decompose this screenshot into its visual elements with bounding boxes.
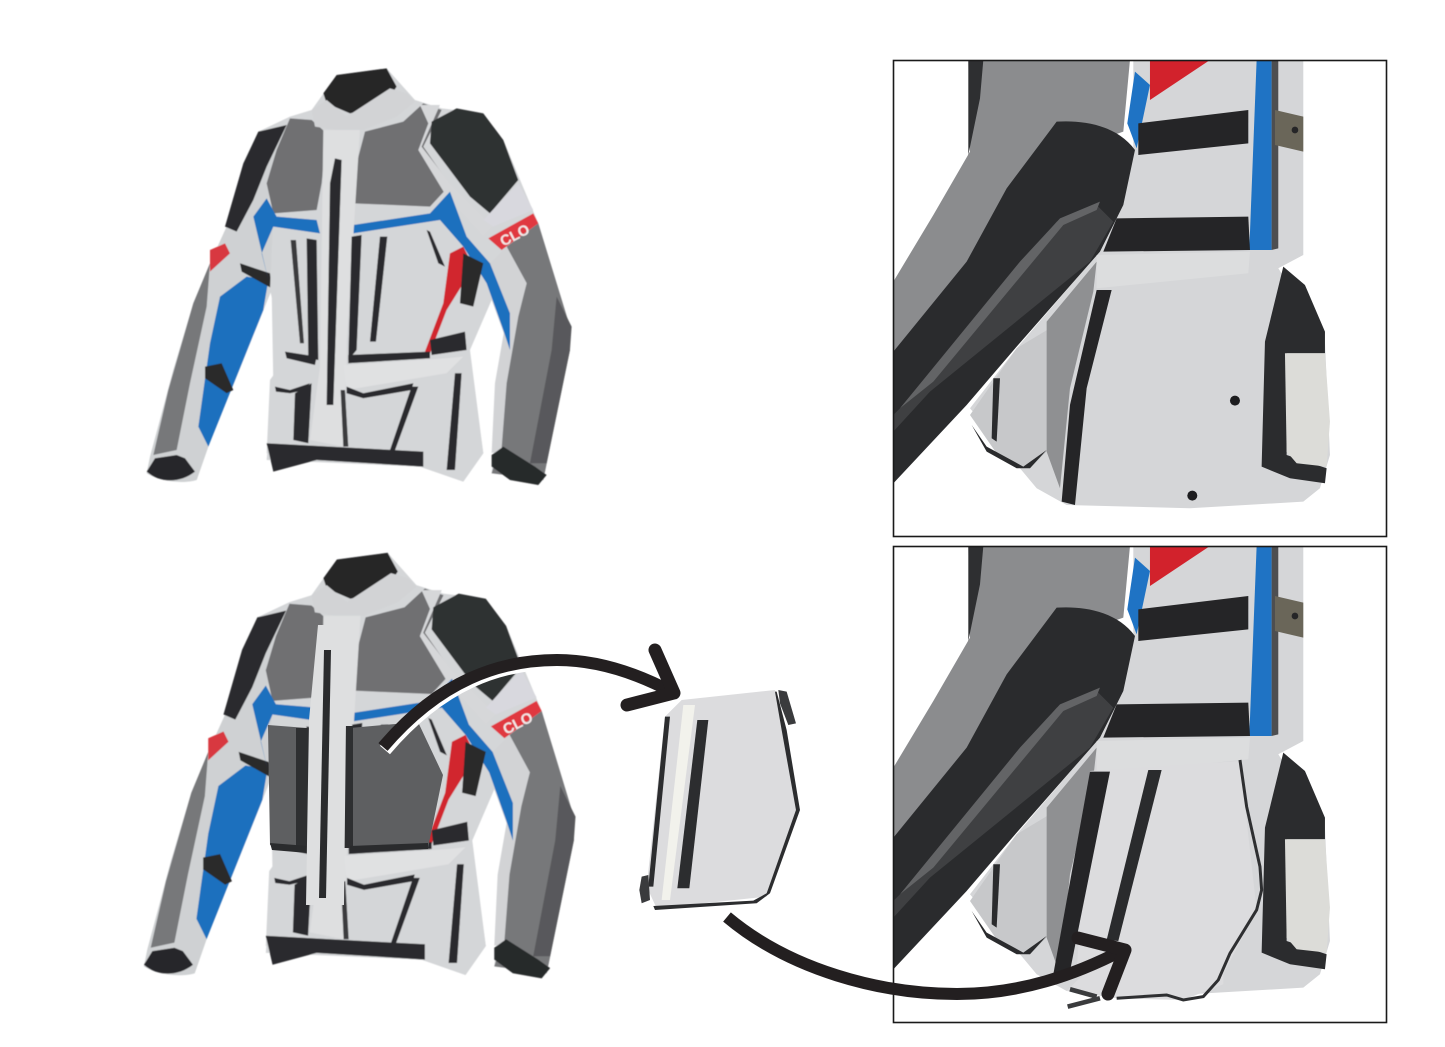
jacket with panel attached (top left) <box>147 68 572 485</box>
mesh lower band <box>270 843 428 853</box>
black zip strip <box>1062 290 1112 505</box>
centre placket <box>306 625 356 905</box>
inset photo: closed lower jacket <box>893 60 1330 508</box>
centre zip <box>319 650 331 898</box>
arrow: panel added to inset <box>727 917 1125 994</box>
detachable panel <box>639 690 800 910</box>
mesh side shadow strips <box>296 726 353 852</box>
black zip strips <box>1053 772 1110 974</box>
panel zip edge <box>1117 760 1262 1000</box>
inset frame top <box>894 60 1386 536</box>
arrow: panel removed from jacket <box>383 650 674 750</box>
inset frame bottom <box>894 546 1386 1022</box>
snap buttons <box>1187 396 1240 501</box>
mesh opening <box>268 722 443 852</box>
zip pull <box>1068 989 1100 1007</box>
jacket with panel removed showing mesh (bottom left) <box>144 553 576 978</box>
panel fill <box>1068 770 1199 1000</box>
inset photo: lower jacket with added panel <box>893 546 1330 1007</box>
